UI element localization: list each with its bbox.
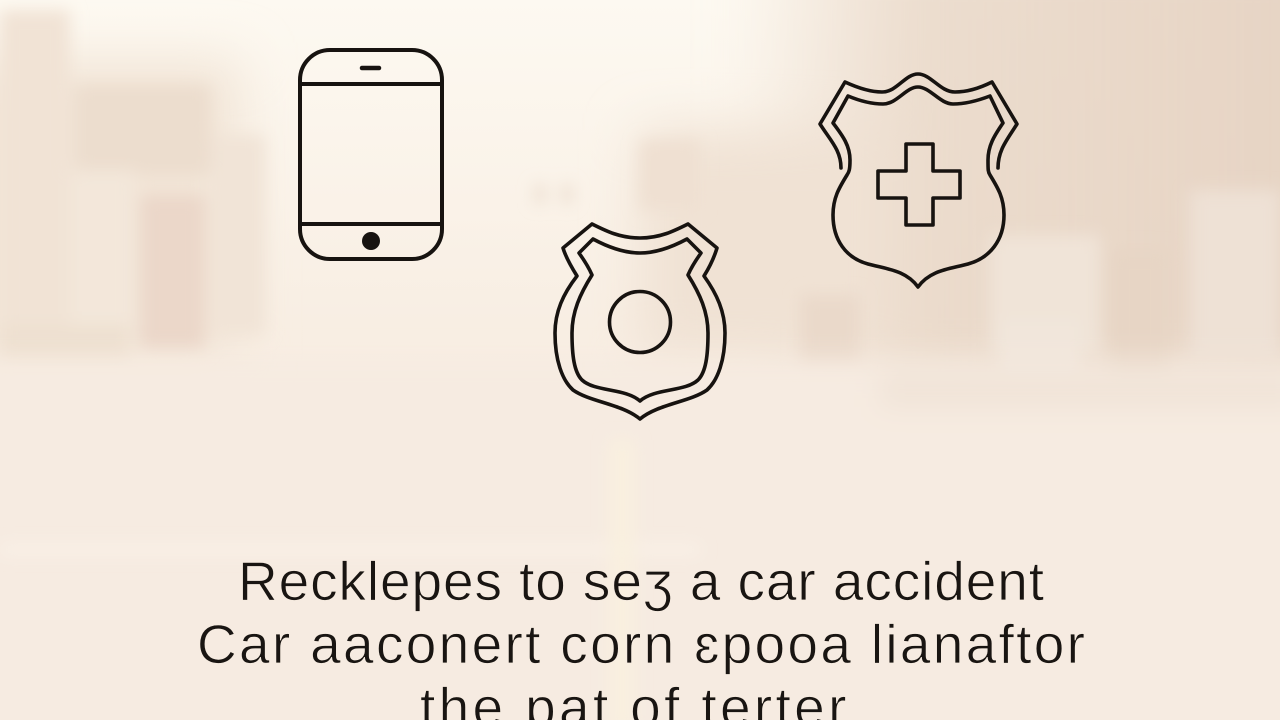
caption line 1: Recklepes to seʒ a car accident — [238, 550, 1044, 612]
icon: medical shield with cross — [820, 74, 1017, 287]
caption text — [197, 550, 1085, 720]
caption line 2: Car aaconert corn ɛpooa lianaftor — [197, 613, 1085, 675]
icon: smartphone — [300, 50, 442, 259]
icon: police badge shield — [555, 224, 725, 419]
